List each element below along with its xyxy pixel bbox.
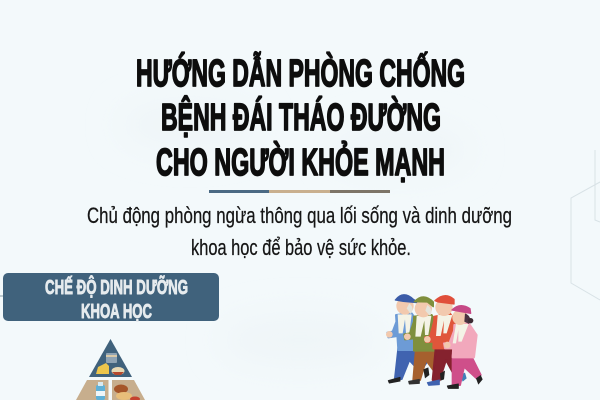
section heading: nutrition <box>3 273 219 323</box>
runner: green <box>404 297 443 384</box>
section heading: nutrition: KHOA HỌC <box>81 301 152 323</box>
runner: blue <box>386 295 428 383</box>
runner: pink <box>444 306 483 388</box>
subtitle <box>87 203 512 260</box>
icon: food pyramid <box>76 339 145 400</box>
subtitle: khoa học để bảo vệ sức khỏe. <box>191 235 411 260</box>
illustration: four seniors walking <box>386 295 483 388</box>
runner: red <box>424 296 467 385</box>
title <box>136 50 465 184</box>
title divider <box>209 190 390 193</box>
section heading: nutrition: CHẾ ĐỘ DINH DƯỠNG <box>45 275 188 299</box>
